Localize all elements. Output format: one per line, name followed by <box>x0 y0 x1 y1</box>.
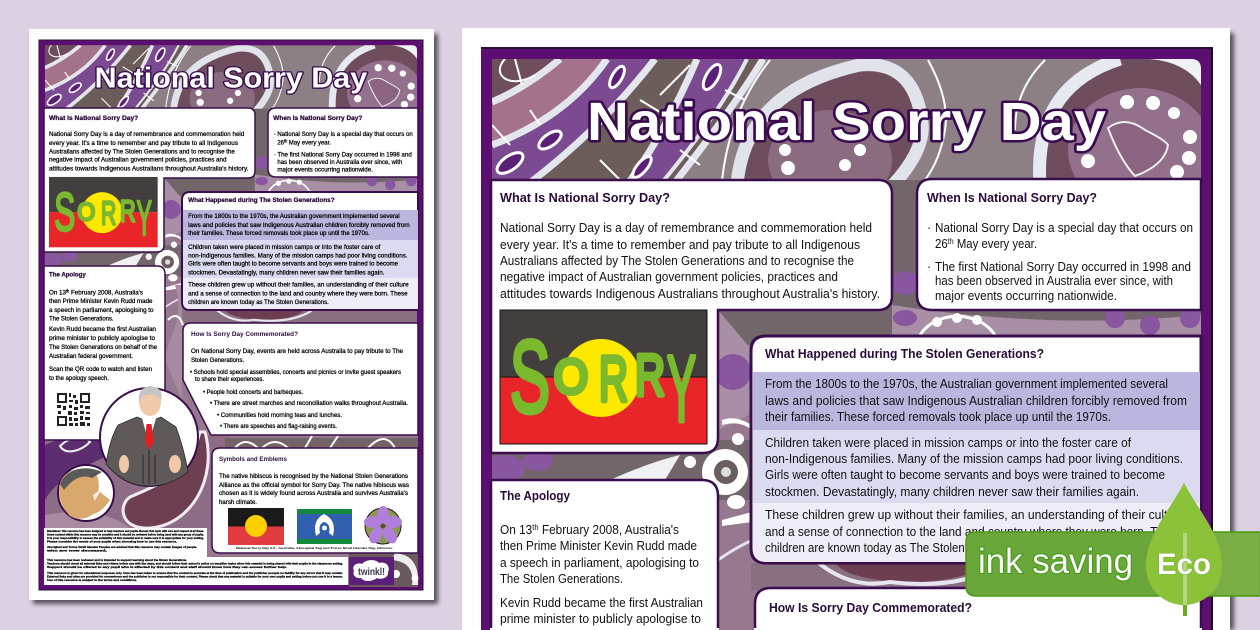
logo: twinkl: twinkl! <box>358 567 385 578</box>
panel: symbols and emblems <box>212 448 418 553</box>
body text <box>765 377 1187 555</box>
thumbnail lower text: • Schools hold special assemblies, concerts and picnics or invite guest speakers <box>190 369 402 376</box>
thumbnail flag and upper text: a speech in parliament, apologising to <box>49 307 154 314</box>
illustration: crying person <box>58 465 114 521</box>
illustration: kevin rudd <box>100 386 198 486</box>
small print: This resource has been reviewed and is intended to support learning about the Stolen Generations. <box>47 558 187 562</box>
body text: their families. These forced removals took place up until the 1970s. <box>765 410 1111 424</box>
thumbnail flag and upper text: laws and policies that saw Indigenous Australian children forcibly removed from <box>188 222 410 229</box>
sorry flag: R <box>599 343 628 415</box>
icon: hibiscus flower <box>364 506 402 546</box>
thumbnail lower text: On National Sorry Day, events are held across Australia to pay tribute to The <box>191 348 403 355</box>
bullet list: National Sorry Day is a special day that occurs on <box>935 221 1193 235</box>
thumbnail flag and upper text: National Sorry Day is a special day that occurs on <box>277 131 413 138</box>
thumbnail lower text: to share their experiences. <box>195 376 264 383</box>
small print: This resource is given for educational purposes only. Care has been taken to ensure that the content is accurate at the time of publication and the publisher accepts no liability for any errors that it may contain. <box>47 571 343 575</box>
bullet list: May every year. <box>954 237 1037 251</box>
panel: the apology <box>490 480 719 630</box>
thumbnail flag and upper text: children are known today as The Stolen Generations. <box>188 299 329 306</box>
thumbnail flag and upper text: attitudes towards Indigenous Australians throughout Australia's history. <box>49 166 249 173</box>
thumbnail lower text: prime minister to publicly apologise to <box>49 335 155 342</box>
heading: How Is Sorry Day Commemorated? <box>769 600 972 615</box>
panel: how is sorry day commemorated <box>754 588 1202 630</box>
heading: The Apology <box>500 488 571 503</box>
thumbnail lower text: to the apology speech. <box>49 375 109 382</box>
lower artwork <box>45 285 418 587</box>
thumbnail flag and upper text: On 13 <box>49 290 67 297</box>
thumbnail lower text: How Is Sorry Day Commemorated? <box>191 331 298 338</box>
thumbnail lower text: The Stolen Generations on behalf of the <box>49 344 157 351</box>
body text: These children grew up without their families, an understanding of their culture <box>765 508 1185 522</box>
body text: Australians affected by The Stolen Generations and to recognise the <box>500 254 854 268</box>
thumbnail lower text: The native hibiscus is recognised by the National Stolen Generations <box>219 473 409 480</box>
body text: National Sorry Day is a day of remembrance and commemoration held <box>500 221 872 235</box>
body text: From the 1800s to the 1970s, the Australian government implemented several <box>765 377 1168 391</box>
body text: The Stolen Generations. <box>500 572 623 586</box>
thumbnail flag and upper text: From the 1800s to the 1970s, the Australian government implemented several <box>188 213 400 220</box>
small print <box>44 528 348 585</box>
sorry flag: R <box>101 196 116 233</box>
sorry flag: R <box>635 343 665 408</box>
icon: leaf <box>1146 483 1222 616</box>
flag: aboriginal <box>228 508 284 545</box>
ink saving eco badge <box>966 483 1259 616</box>
body text: Girls were often taught to become servants and boys were trained to become <box>765 468 1165 482</box>
body text <box>500 523 703 626</box>
thumbnail flag and upper text: 26 <box>277 139 285 146</box>
body text: every year. It's a time to remember and pay tribute to all Indigenous <box>500 238 860 252</box>
thumbnail lower text: Stolen Generations. <box>191 357 244 364</box>
body text: non-Indigenous families. Many of the mission camps had poor living conditions. <box>765 452 1183 466</box>
poster enlarged view <box>462 28 1234 630</box>
thumbnail lower text: chosen as it is widely found across Australia and survives Australia's <box>219 490 409 497</box>
sorry flag <box>49 177 158 247</box>
body text: laws and policies that saw Indigenous Australian children forcibly removed from <box>765 394 1187 408</box>
thumbnail flag and upper text: The Stolen Generations. <box>49 315 114 322</box>
thumbnail flag and upper text <box>49 63 413 322</box>
sorry flag: S <box>54 183 75 242</box>
thumbnail flag and upper text: The first National Sorry Day occurred in 1998 and <box>277 151 412 158</box>
badge label: ink saving <box>978 542 1133 581</box>
panel: what happened <box>182 192 418 310</box>
body text: children are known today as The Stolen Generations. <box>765 541 1033 555</box>
thumbnail flag and upper text: What Is National Sorry Day? <box>49 115 138 122</box>
thumbnail flag and upper text: · <box>274 151 276 158</box>
thumbnail lower text: • Communities hold morning teas and lunches. <box>217 412 342 419</box>
thumbnail flag and upper text: National Sorry Day is a day of remembrance and commemoration held <box>49 131 245 138</box>
badge eco label: Eco <box>1157 548 1211 581</box>
panel: the apology <box>44 266 165 440</box>
sorry flag <box>500 310 707 444</box>
thumbnail flag and upper text: major events occurring nationwide. <box>277 167 373 174</box>
thumbnail flag and upper text: May every year. <box>287 139 331 146</box>
body text: stockmen. Devastatingly, many children never saw their families again. <box>765 485 1139 499</box>
body text <box>500 221 880 301</box>
small print: Teachers should check all external links and videos before use with the class, and should follow their school's policy on sensitive topics when this material is being shared with their pupils in the classroom setting. <box>47 562 343 566</box>
thumbnail lower text: Scan the QR code to watch and listen <box>49 366 152 373</box>
sorry flag: R <box>120 195 136 229</box>
thumbnail flag and upper text: and a sense of connection to the land and country where they were born. These <box>188 291 408 298</box>
thumbnail flag and upper text: February 2008, Australia's <box>69 290 144 297</box>
thumbnail flag and upper text: their families. These forced removals took place up until the 1970s. <box>188 230 370 237</box>
body text: February 2008, Australia's <box>539 523 679 537</box>
thumbnail lower text: harsh climate. <box>219 499 257 506</box>
body text: Kevin Rudd became the first Australian <box>500 596 703 610</box>
panel: what happened during the stolen generations <box>751 336 1201 563</box>
small print: who are now deceased. <box>45 548 107 552</box>
bullet list: 26 <box>935 237 949 251</box>
title: National Sorry Day <box>95 63 367 95</box>
sorry flag: O <box>77 199 95 227</box>
small print: Disclaimer: this resource has been designed to help teachers and pupils discuss this topic with care and respect at all times. <box>47 529 204 533</box>
panel: what is national sorry day <box>44 108 255 252</box>
thumbnail lower text: Kevin Rudd became the first Australian <box>49 326 156 333</box>
flag: torres strait islander <box>297 509 352 544</box>
small print: External links and sites are provided for convenience and the publisher is not responsible for their content. Please check that any material is suitable for your own pupils and setting before you use it in a lesson. <box>47 574 343 578</box>
thumbnail flag and upper text: non-Indigenous families. Many of the mission camps had poor living conditions. <box>188 252 408 259</box>
body text: th <box>532 523 539 532</box>
panel: how is sorry day commemorated <box>183 323 418 435</box>
small print: Aboriginal and Torres Strait Islander Peoples are advised that this resource may contain images of people. <box>47 545 197 549</box>
body text: negative impact of Australian government policies, practices and <box>500 270 838 284</box>
thumbnail flag and upper text: negative impact of Australian government policies, practices and <box>49 157 227 164</box>
thumbnail flag and upper text: has been observed in Australia ever since, with <box>277 159 403 166</box>
sorry flag: S <box>510 320 550 434</box>
sorry flag: Y <box>137 191 152 246</box>
bullet list: · <box>927 221 931 235</box>
thumbnail flag and upper text: These children grew up without their families, an understanding of their culture <box>188 282 409 289</box>
heading: When Is National Sorry Day? <box>927 190 1097 205</box>
thumbnail lower text <box>49 326 410 506</box>
thumbnail lower text: • People hold concerts and barbeques. <box>203 389 303 396</box>
bullet list: has been observed in Australia ever since, with <box>935 274 1173 288</box>
title: National Sorry Day <box>587 92 1106 152</box>
body text: then Prime Minister Kevin Rudd made <box>500 539 697 553</box>
thumbnail flag and upper text: · <box>274 131 276 138</box>
body text: a speech in parliament, apologising to <box>500 556 699 570</box>
small print: Please consider the needs of your pupils when choosing how to use this resource. <box>47 540 177 544</box>
panel: what is national sorry day <box>491 180 892 453</box>
thumbnail flag and upper text: The Apology <box>49 272 86 279</box>
thumbnail lower text: Australian federal government. <box>49 353 133 360</box>
thumbnail flag and upper text: th <box>284 138 288 143</box>
body text: attitudes towards Indigenous Australians throughout Australia's history. <box>500 287 880 301</box>
body text: prime minister to publicly apologise to <box>500 612 701 626</box>
body text: On 13 <box>500 523 534 537</box>
thumbnail lower text: • There are street marches and reconciliation walks throughout Australia. <box>210 400 408 407</box>
thumbnail flag and upper text: Children taken were placed in mission camps or into the foster care of <box>188 244 380 251</box>
panel: when is national sorry day <box>917 179 1201 310</box>
small print: It is your responsibility to assess the suitability of this material and to make sure it is appropriate for your setting. <box>47 536 204 540</box>
small print: Support should be offered to any pupil who is affected by this content and staff should know how they can access further help. <box>47 565 287 569</box>
thumbnail flag and upper text: Australians affected by The Stolen Generations and to recognise the <box>49 148 235 155</box>
thumbnail flag and upper text: What Happened during The Stolen Generations? <box>188 197 335 204</box>
thumbnail lower text: • There are speeches and flag-raising events. <box>220 423 337 430</box>
panel: when is national sorry day <box>268 108 418 177</box>
thumbnail flag and upper text: When Is National Sorry Day? <box>273 115 362 122</box>
small print: Some content within this resource may be sensitive and it should be reviewed before being used with any group of pupils. <box>47 532 204 536</box>
thumbnail flag and upper text: th <box>66 288 70 293</box>
body text: Children taken were placed in mission camps or into the foster care of <box>765 436 1131 450</box>
thumbnail flag and upper text: then Prime Minister Kevin Rudd made <box>49 298 153 305</box>
bullet list: major events occurring nationwide. <box>935 289 1117 303</box>
bullet list <box>927 221 1193 303</box>
thumbnail lower text: Alliance as the official symbol for Sorry Day. The native hibiscus was <box>219 482 410 489</box>
thumbnail flag and upper text: stockmen. Devastatingly, many children never saw their families again. <box>188 270 385 277</box>
thumbnail lower text: Symbols and Emblems <box>219 456 287 463</box>
thumbnail flag and upper text: every year. It's a time to remember and pay tribute to all Indigenous <box>49 140 239 147</box>
bullet list: th <box>948 237 954 246</box>
thumbnail flag and upper text: Girls were often taught to become servants and boys were trained to become <box>188 261 398 268</box>
small print: Use of this resource is subject to the terms and conditions. <box>47 578 137 582</box>
sorry flag: O <box>554 351 588 404</box>
heading: What Is National Sorry Day? <box>500 190 670 205</box>
bullet list: The first National Sorry Day occurred in 1998 and <box>935 260 1191 274</box>
heading: What Happened during The Stolen Generations? <box>765 346 1044 361</box>
flags caption: National Sorry Day 2.0 · Australia, Aboriginal flag and Torres Strait Islander flag, hibiscus. <box>236 546 393 550</box>
sorry flag: Y <box>667 336 696 441</box>
bullet list: · <box>927 260 931 274</box>
poster thumbnail <box>29 29 438 604</box>
qr code <box>57 393 90 426</box>
body text: and a sense of connection to the land and country where they were born. These <box>765 525 1183 539</box>
logo: twinkl <box>349 557 394 585</box>
